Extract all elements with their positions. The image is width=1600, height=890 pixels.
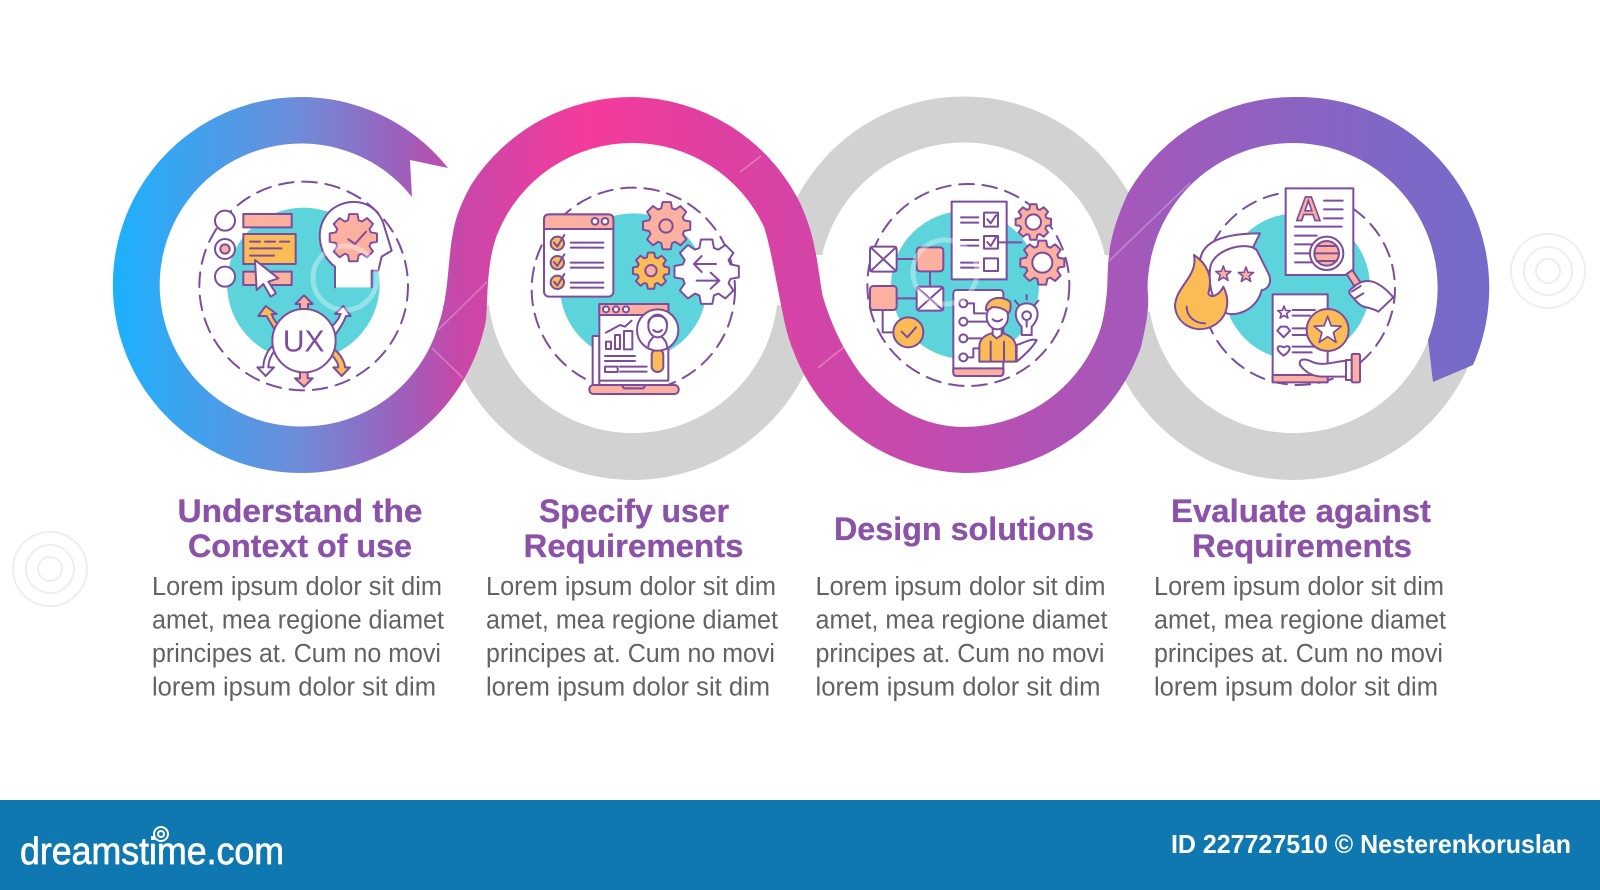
review card (1273, 294, 1360, 382)
step 1 heading: Context of use (188, 528, 412, 564)
step 1 text: principes at. Cum no movi (152, 640, 441, 668)
gradient ribbon arrow (113, 97, 1489, 473)
flow diagram (870, 247, 943, 347)
step 4 text: principes at. Cum no movi (1154, 640, 1443, 668)
step 4 text: lorem ipsum dolor sit dim (1154, 674, 1438, 702)
checklist document (952, 202, 1022, 279)
teal disc (891, 211, 1039, 359)
dashed ring (532, 188, 735, 391)
dashed ring (867, 184, 1069, 386)
lightbulb (1015, 295, 1038, 335)
icon: specify requirements (532, 188, 739, 394)
UX arrows (257, 295, 351, 387)
white inner discs (488, 143, 1438, 433)
head and flame (1175, 233, 1270, 329)
step 2 text: amet, mea regione diamet (486, 606, 778, 634)
option list (215, 211, 296, 297)
step 3 text: amet, mea regione diamet (816, 606, 1108, 634)
step 2 text (486, 573, 778, 702)
phone with person (953, 290, 1037, 376)
UX label: UX (283, 325, 324, 359)
step 2 text: principes at. Cum no movi (486, 640, 775, 668)
watermark spirals (13, 234, 1585, 606)
gears (633, 202, 739, 304)
letter A: A (1296, 191, 1321, 229)
step 4 heading (1171, 493, 1431, 564)
step 4 heading: Evaluate against (1171, 493, 1431, 529)
icon: evaluate requirements (1175, 188, 1395, 385)
step 1 text: lorem ipsum dolor sit dim (152, 674, 436, 702)
step 1 heading: Understand the (178, 493, 422, 529)
footer band (0, 800, 1600, 890)
step 1 text (152, 573, 444, 702)
teal disc (227, 208, 380, 360)
laptop (589, 304, 679, 394)
step 3 heading: Design solutions (834, 511, 1094, 547)
step 4 text (1154, 573, 1446, 702)
grey arc: step 3 (797, 96, 1128, 255)
watermark lines on ribbon (432, 156, 1190, 378)
step 1 heading (178, 493, 422, 564)
gears (1016, 204, 1064, 285)
step 1 text: amet, mea regione diamet (152, 606, 444, 634)
footer logo spiral (154, 827, 168, 841)
teal disc (560, 213, 707, 360)
teal disc (1223, 213, 1370, 360)
checklist window (544, 214, 613, 297)
step 2 text: Lorem ipsum dolor sit dim (486, 573, 776, 601)
grey arc: step 4 (1125, 312, 1468, 480)
document with magnifier (1286, 188, 1353, 275)
dashed ring (199, 182, 408, 390)
step 3 text: principes at. Cum no movi (816, 640, 1104, 668)
step 4 text: amet, mea regione diamet (1154, 606, 1446, 634)
head with gear (320, 202, 392, 287)
dashed ring (1202, 192, 1395, 385)
grey arc: step 2 (442, 305, 804, 480)
step 4 text: Lorem ipsum dolor sit dim (1154, 573, 1444, 601)
step 3 text: lorem ipsum dolor sit dim (816, 674, 1100, 702)
magnifier and hand (1310, 237, 1393, 312)
icon: UX context (199, 182, 408, 390)
footer logo: dreamstime.com (20, 831, 284, 873)
step 1 text: Lorem ipsum dolor sit dim (152, 573, 442, 601)
step 4 heading: Requirements (1192, 528, 1412, 564)
step 2 heading: Requirements (524, 528, 744, 564)
watermark over icon (313, 240, 977, 310)
icon: design solutions (867, 184, 1069, 386)
step 3 text: Lorem ipsum dolor sit dim (816, 573, 1106, 601)
step 2 text: lorem ipsum dolor sit dim (486, 674, 770, 702)
step 2 heading: Specify user (539, 493, 729, 529)
footer credit: ID 227727510 © Nesterenkoruslan (1171, 829, 1571, 859)
step 2 heading (524, 493, 744, 564)
step 3 text (816, 573, 1108, 702)
